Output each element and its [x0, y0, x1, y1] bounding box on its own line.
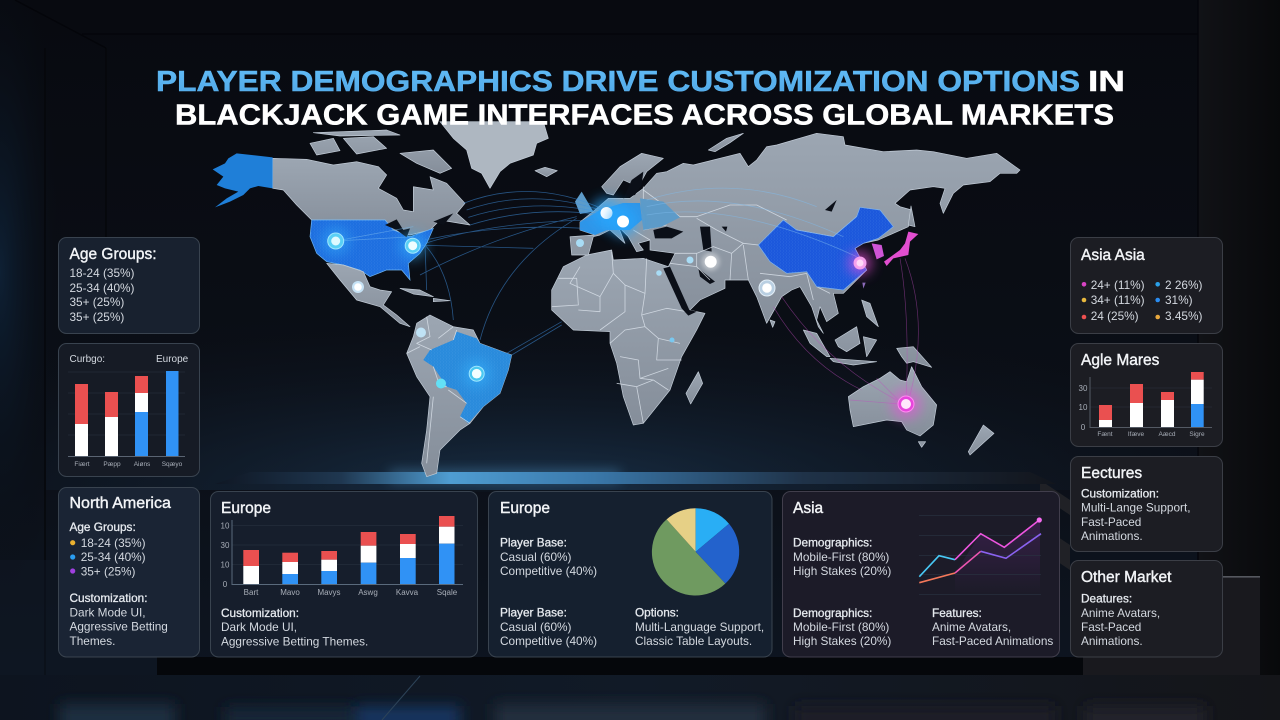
- map node: Australia: [891, 389, 921, 419]
- panel: features: Customization:: [1081, 487, 1159, 501]
- panel: Asia: [782, 492, 1060, 657]
- map node: Spain: [576, 239, 584, 247]
- panel: Europe pie and options: Europe: [500, 500, 550, 517]
- China: [758, 207, 893, 290]
- map node: Brazil: [463, 360, 491, 388]
- panel: features: Eectures: [1081, 465, 1142, 482]
- panel: Asia Asia: 31%): [1165, 293, 1193, 307]
- title: IN: [1088, 66, 1125, 98]
- title: [156, 66, 1125, 132]
- panel: Europe chart: Dark Mode UI,: [221, 620, 297, 634]
- title: PLAYER DEMOGRAPHICS DRIVE CUSTOMIZATION OPTIONS: [156, 66, 1080, 98]
- African borders: [552, 252, 687, 423]
- panel: Europe pie and options: Classic Table Layouts.: [635, 634, 752, 648]
- Germany / Poland highlight: [640, 198, 680, 230]
- panel: Asia Asia: 34+ (11%): [1091, 293, 1145, 307]
- Novaya Zemlya: [708, 133, 743, 152]
- panel: Asia: Fast-Paced Animations: [932, 634, 1053, 648]
- panel: age groups: Age Groups:: [70, 246, 157, 263]
- panel: Asia: Features:: [932, 606, 982, 620]
- panel: North America: Customization:: [70, 591, 148, 605]
- panel: North America: Themes.: [70, 634, 115, 648]
- panel: right bar chart: Ifæve: [1128, 431, 1145, 438]
- panel: Europe pie and options: [488, 492, 772, 657]
- stage platform glow: [215, 470, 1056, 484]
- panel: left bar chart: Sqæyo: [162, 461, 183, 468]
- panel: Europe chart: 0: [223, 580, 228, 589]
- panel: age groups: 35+ (25%): [70, 295, 124, 309]
- South America: [407, 315, 512, 477]
- panel: right bar chart: Fænt: [1097, 431, 1113, 438]
- Korea: [872, 243, 884, 259]
- panel: right bar chart: Aæcd: [1159, 431, 1176, 438]
- Arctic islands: [310, 130, 452, 173]
- panel: features: [1070, 456, 1222, 552]
- panel: Europe chart: Aggressive Betting Themes.: [221, 634, 368, 648]
- map node: US East: [399, 232, 427, 260]
- panel: Europe pie and options: Player Base:: [500, 536, 567, 550]
- panel: Asia Asia: 2 26%): [1165, 278, 1202, 292]
- panel: North America: Dark Mode UI,: [70, 606, 146, 620]
- panel: Asia: Demographics:: [793, 536, 872, 550]
- panel: other market: Animations.: [1081, 634, 1143, 648]
- panel: North America: [58, 488, 200, 657]
- Mexico and Central America: [327, 263, 410, 327]
- panel: right bar chart: 10: [1079, 403, 1088, 412]
- panel: Europe pie and options: Casual (60%): [500, 550, 572, 564]
- Canada: [273, 158, 470, 235]
- panel: Asia: High Stakes (20%): [793, 564, 891, 578]
- panel: Europe chart: 30: [221, 541, 230, 550]
- South American borders: [407, 317, 470, 463]
- map node: Central Europe: [608, 206, 638, 236]
- Japan: [884, 232, 918, 266]
- Inland seas: [623, 172, 837, 316]
- Americas: [213, 122, 557, 477]
- panel: Europe chart: [210, 492, 478, 657]
- Scandinavia: [602, 153, 663, 195]
- panel: North America: North America: [70, 495, 171, 512]
- map node: India: [759, 280, 775, 296]
- panel: other market: Deatures:: [1081, 592, 1132, 606]
- Old World: [552, 133, 1020, 455]
- panel: age groups: 35+ (25%): [70, 310, 124, 324]
- panel: North America: Age Groups:: [70, 520, 136, 534]
- panel: Europe chart: Europe: [221, 500, 271, 517]
- panel: North America: 25-34 (40%): [81, 550, 146, 564]
- panel: Europe pie and options: Competitive (40%): [500, 634, 597, 648]
- map node: Egypt: [656, 270, 662, 276]
- Brazil: [423, 332, 512, 423]
- panel: right bar chart: [1070, 344, 1222, 446]
- panel: Asia Asia: [1070, 238, 1222, 334]
- panel: age groups: 25-34 (40%): [70, 281, 134, 295]
- bars: [1099, 372, 1204, 427]
- Greenland: [440, 122, 548, 188]
- Eurasia: [570, 133, 1020, 333]
- panel: left bar chart: Europe: [156, 354, 189, 365]
- panel: right bar chart: 30: [1079, 384, 1088, 393]
- panel: other market: Fast-Paced: [1081, 620, 1141, 634]
- map node: Iran: [702, 253, 720, 271]
- panel: other market: Other Market: [1081, 569, 1172, 586]
- map node: US West: [322, 227, 350, 255]
- Iceland: [535, 167, 557, 177]
- UK: [575, 192, 593, 214]
- panel: features: Multi-Lange Support,: [1081, 501, 1191, 515]
- pink arcs: [773, 258, 918, 404]
- panel: Europe pie and options: Options:: [635, 606, 679, 620]
- panel: Europe pie and options: Multi-Language Support,: [635, 620, 764, 634]
- panel: Asia: Demographics:: [793, 606, 872, 620]
- panel: Europe pie and options: Player Base:: [500, 606, 567, 620]
- panel: North America: 18-24 (35%): [81, 536, 146, 550]
- Madagascar: [686, 372, 703, 404]
- Africa: [552, 250, 705, 425]
- bars: [243, 516, 454, 584]
- panel: right bar chart: Agle Mares: [1081, 352, 1160, 369]
- panel: left bar chart: [58, 344, 200, 476]
- panel: Asia Asia: 24 (25%): [1091, 309, 1139, 323]
- panel: Asia: High Stakes (20%): [793, 634, 891, 648]
- panel: Europe chart: 10: [221, 522, 230, 530]
- panel: North America: 35+ (25%): [81, 564, 136, 578]
- Caribbean: [400, 288, 450, 302]
- panel: Asia: Mobile-First (80%): [793, 550, 889, 564]
- title: BLACKJACK GAME INTERFACES ACROSS GLOBAL MARKETS: [175, 100, 1114, 132]
- Tasmania and New Zealand: [918, 425, 994, 455]
- panel: right bar chart: 0: [1081, 423, 1086, 432]
- panel: left bar chart: Curbgo:: [70, 354, 105, 365]
- panel: North America: Aggressive Betting: [70, 620, 168, 634]
- panel: Europe pie and options: Competitive (40%): [500, 564, 597, 578]
- panel: Asia: Mobile-First (80%): [793, 620, 889, 634]
- panel: features: Fast-Paced: [1081, 515, 1141, 529]
- panel: left bar chart: Aiøns: [134, 461, 151, 468]
- USA: [310, 220, 433, 280]
- Taiwan: [862, 283, 866, 289]
- panel: Europe chart: 10: [221, 560, 230, 570]
- panel: Europe pie and options: Casual (60%): [500, 620, 572, 634]
- map node: China East: [848, 251, 872, 275]
- panel: other market: Anime Avatars,: [1081, 606, 1160, 620]
- France / Central Europe highlight: [580, 203, 642, 235]
- Alaska: [213, 153, 273, 207]
- Asian borders: [633, 187, 857, 300]
- panel: other market: [1070, 560, 1222, 657]
- connection arcs: [336, 188, 857, 355]
- panel: age groups: [58, 238, 200, 334]
- Sakhalin: [908, 206, 915, 227]
- panel: left bar chart: Fiært: [74, 461, 90, 468]
- Southeast Asia islands: [770, 300, 932, 367]
- panel: age groups: 18-24 (35%): [70, 266, 134, 280]
- panel: features: Animations.: [1081, 529, 1143, 543]
- panel: Asia Asia: Asia Asia: [1081, 247, 1145, 264]
- panel: Asia: Anime Avatars,: [932, 620, 1011, 634]
- panel: Europe chart: Mavys: [317, 588, 341, 597]
- panel: Asia Asia: 24+ (11%): [1091, 278, 1145, 292]
- map node: Iraq: [686, 256, 694, 264]
- map node: Western Europe: [592, 198, 622, 228]
- map node: Bolivia: [436, 378, 446, 388]
- line chart: [919, 516, 1042, 594]
- map node: Mexico: [352, 281, 364, 293]
- Great Lakes: [385, 213, 453, 237]
- panel: right bar chart: Sigre: [1189, 431, 1205, 438]
- Australia: [848, 367, 937, 436]
- bars: [75, 371, 178, 456]
- panel: Europe chart: Bart: [244, 588, 259, 597]
- panel: Europe chart: Kavva: [396, 588, 419, 597]
- world map: [213, 122, 1020, 477]
- panel: Europe chart: Customization:: [221, 606, 299, 620]
- map node: Colombia: [416, 328, 426, 338]
- pie chart: [652, 508, 739, 596]
- panel: Europe chart: Sqale: [437, 588, 458, 597]
- panel: Europe chart: Mavo: [280, 588, 300, 597]
- panel: Europe chart: Aswg: [358, 588, 378, 597]
- panel: Asia Asia: 3.45%): [1165, 309, 1202, 323]
- panel: Asia: Asia: [793, 500, 824, 517]
- panel: left bar chart: Pæpp: [103, 461, 121, 468]
- map node: East Africa: [670, 338, 674, 342]
